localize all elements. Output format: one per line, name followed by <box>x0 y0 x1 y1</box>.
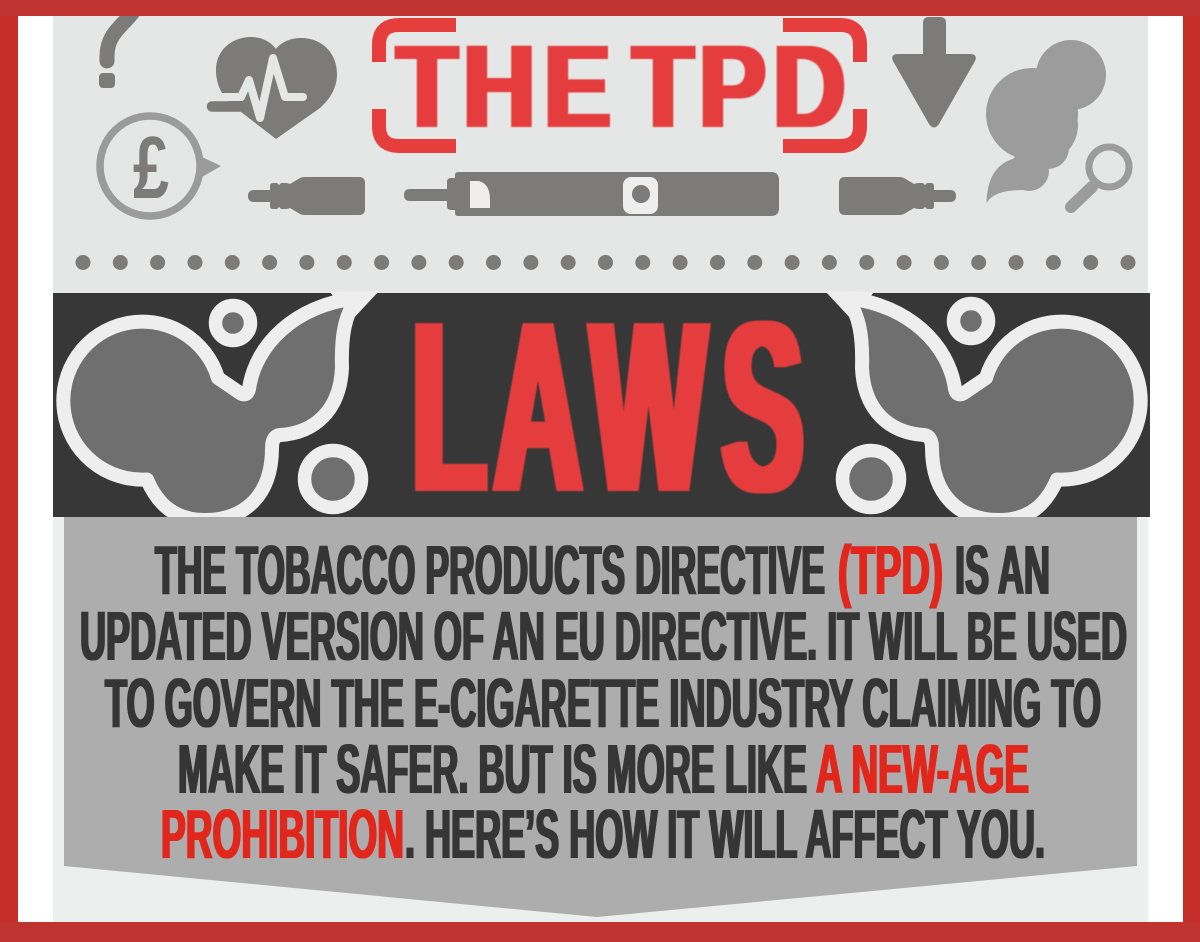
icon: vape pen <box>404 172 779 216</box>
heading: LAWS: LAWS <box>412 270 803 543</box>
icon: right e-liquid bottle <box>839 177 956 215</box>
icon: left e-liquid bottle <box>248 177 365 215</box>
icon: magnifying glass <box>1071 147 1129 207</box>
title: THE TPD: THE TPD <box>396 21 845 153</box>
icon: pound speech bubble: £ <box>133 118 169 217</box>
text block: directive description: (TPD) <box>838 531 943 609</box>
icon: smoke cloud <box>986 40 1106 203</box>
text block: directive description: IS AN <box>955 531 1050 609</box>
icon: left smoke cloud <box>63 291 379 520</box>
panel: directive description arrow <box>64 517 1137 917</box>
icon: question mark <box>99 12 133 88</box>
text block: directive description: PROHIBITION <box>161 795 404 873</box>
panel: dark LAWS band <box>53 293 1150 517</box>
icon: pound speech bubble <box>100 116 221 217</box>
icon: down arrow <box>892 17 976 128</box>
text block: directive description <box>80 531 1127 873</box>
icon: heart with pulse line <box>212 37 337 139</box>
dotted divider <box>76 255 1136 270</box>
icon: right smoke cloud <box>825 291 1141 520</box>
